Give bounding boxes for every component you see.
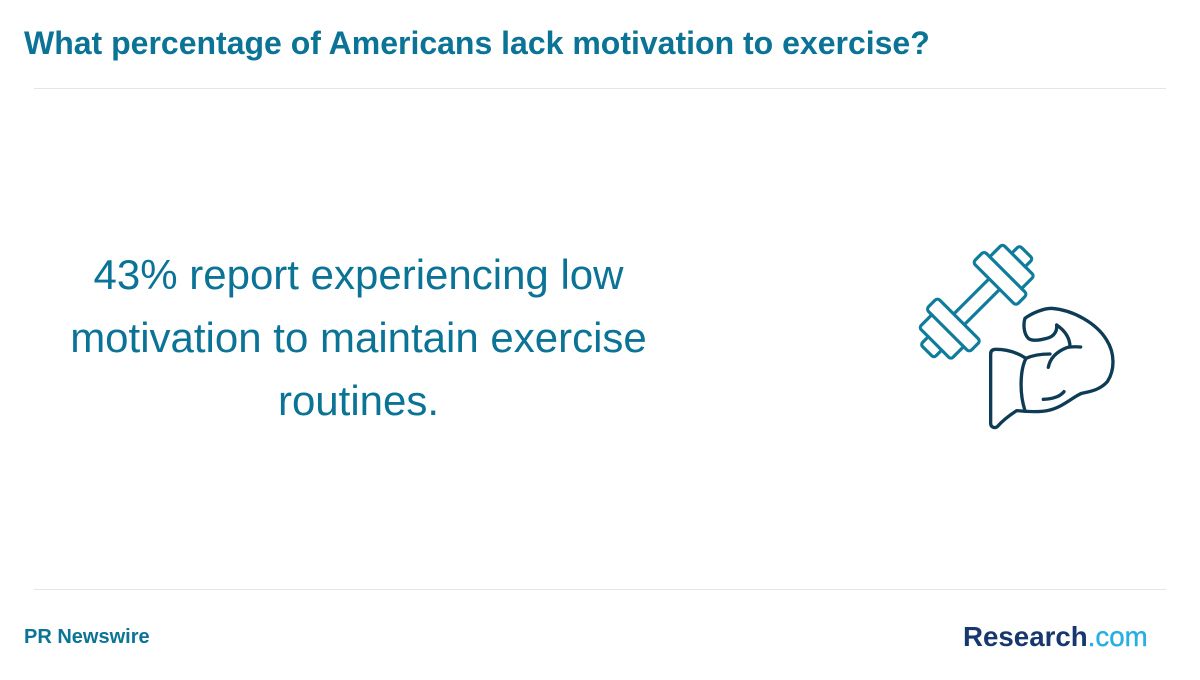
main statement: routines. — [278, 377, 439, 424]
main statement — [70, 251, 647, 424]
logo: Research.com: Research.com — [963, 621, 1148, 652]
source: PR Newswire: PR Newswire — [24, 626, 150, 648]
main statement: motivation to maintain exercise — [70, 314, 647, 361]
icon: dumbbell — [906, 231, 1048, 373]
main statement: 43% report experiencing low — [94, 251, 623, 298]
icon: flexed arm — [991, 308, 1113, 428]
icon: dumbbell and flexed arm — [918, 244, 1115, 430]
title: What percentage of Americans lack motivation to exercise? — [24, 25, 930, 61]
